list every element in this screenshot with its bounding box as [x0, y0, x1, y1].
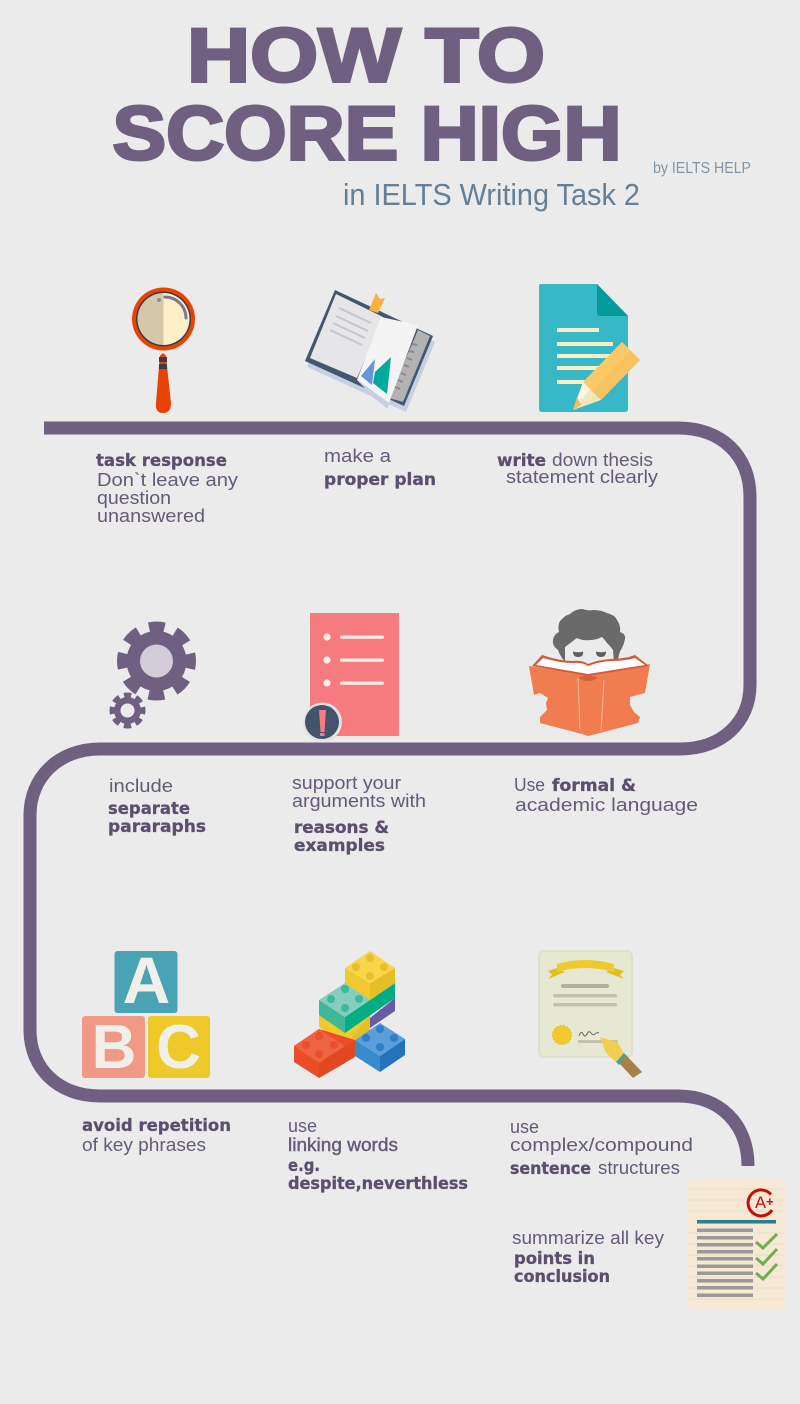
text: reasons and examples: support your: [292, 773, 401, 793]
text: task response: Don`t leave any: [97, 470, 238, 490]
icon: open book with bookmark: [305, 290, 435, 412]
text: conclusion: summarize all key: [512, 1228, 664, 1248]
text: proper plan: make a: [324, 446, 392, 466]
text: sentence structures: structures: [598, 1158, 680, 1178]
text: avoid repetition: [82, 1116, 231, 1155]
icon: graded paper: +: [766, 1194, 774, 1209]
title: SCORE HIGH: [112, 92, 622, 176]
text: linking words: e.g.: [288, 1156, 320, 1176]
text: separate paragraphs: include: [109, 776, 173, 796]
text: proper plan: [324, 446, 436, 490]
text: linking words: [288, 1116, 468, 1194]
byline: by IELTS HELP: [653, 160, 751, 177]
text: conclusion: [512, 1228, 664, 1287]
text: avoid repetition: of key phrases: [82, 1135, 206, 1155]
text: reasons and examples: arguments with: [292, 791, 426, 811]
icon: building bricks: [294, 951, 405, 1078]
text: task response: unanswered: [97, 506, 205, 526]
text: conclusion: conclusion: [514, 1267, 610, 1287]
text: sentence structures: use: [510, 1117, 539, 1137]
text: sentence structures: sentence: [510, 1159, 591, 1179]
icon: note with warning: [303, 613, 399, 742]
icon: gears: [112, 628, 190, 726]
text: formal language: [514, 775, 698, 815]
text: avoid repetition: avoid repetition: [82, 1116, 231, 1136]
text: linking words: despite,neverthless: [288, 1174, 468, 1194]
text: thesis statement: [497, 450, 658, 487]
icon: graded paper: [688, 1180, 785, 1310]
icon: graded paper: A: [755, 1194, 766, 1212]
text: reasons and examples: reasons &: [294, 818, 389, 838]
icon: ABC blocks: [82, 943, 210, 1082]
subtitle: in IELTS Writing Task 2: [343, 177, 640, 212]
icon: magnifying glass: [132, 288, 195, 413]
icon: person reading: [529, 609, 650, 736]
icon: ABC blocks: C: [156, 1013, 201, 1082]
text: conclusion: points in: [514, 1249, 595, 1269]
text: thesis statement: statement clearly: [506, 467, 658, 487]
icon: ABC blocks: B: [92, 1013, 136, 1082]
text: linking words: use: [288, 1116, 317, 1136]
title: HOW TO: [187, 14, 545, 98]
text: linking words: linking words: [288, 1135, 398, 1155]
text: sentence structures: complex/compound: [510, 1135, 693, 1155]
text: separate paragraphs: separate: [108, 799, 190, 819]
text: formal language: academic language: [515, 795, 698, 815]
text: formal language: formal &: [552, 776, 636, 796]
text: reasons and examples: examples: [294, 836, 385, 856]
text: thesis statement: write: [497, 451, 546, 471]
title: [112, 14, 622, 176]
text: separate paragraphs: pararaphs: [108, 817, 206, 837]
icon: ABC blocks: A: [123, 943, 170, 1017]
icon: document with pencil: [539, 284, 640, 412]
text: proper plan: proper plan: [324, 470, 436, 490]
text: task response: task response: [96, 451, 227, 471]
text: task response: [96, 451, 238, 526]
text: thesis statement: down thesis: [552, 450, 653, 470]
text: separate paragraphs: [108, 776, 206, 837]
text: formal language: Use: [514, 775, 545, 795]
text: sentence structures: [510, 1117, 693, 1179]
text: reasons and examples: [292, 773, 426, 856]
winding path: [30, 428, 750, 1166]
icon: certificate with pen: [539, 951, 642, 1078]
text: task response: question: [97, 488, 171, 508]
